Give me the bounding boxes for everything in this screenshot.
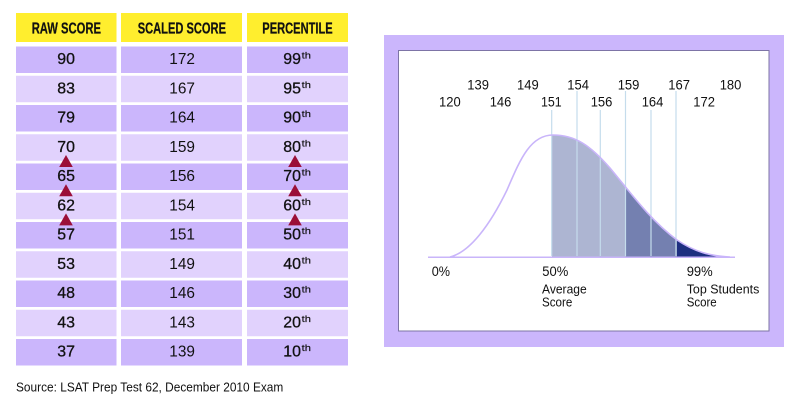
table header row: SCALED SCORE — [138, 20, 226, 37]
label: 50% average score: Score — [542, 296, 572, 310]
row 8 — [16, 251, 348, 278]
shaded bands — [552, 136, 716, 256]
row 8: 149 — [169, 256, 195, 273]
row 5: th — [302, 168, 311, 178]
row 9: 146 — [169, 285, 195, 302]
label: 50% average score: 50% — [542, 264, 568, 279]
scaled score labels: 167 — [668, 78, 690, 92]
row 7: 50 — [283, 226, 301, 244]
row 1: 99 — [283, 51, 301, 68]
row 6: th — [302, 197, 311, 207]
row 11 — [16, 339, 348, 366]
row 6 — [16, 193, 348, 219]
row 3: 79 — [57, 110, 75, 126]
row 4: 159 — [169, 139, 195, 156]
row 1: 90 — [57, 51, 75, 68]
scaled score labels — [439, 78, 741, 110]
row 9: 30 — [283, 285, 301, 302]
row 5 — [16, 164, 348, 190]
row 4 — [16, 134, 348, 161]
row 10: 20 — [283, 314, 301, 331]
table header row: PERCENTILE — [262, 20, 333, 37]
row 9: 48 — [57, 285, 75, 302]
row 3: 164 — [169, 110, 195, 126]
row 1: 172 — [169, 51, 195, 68]
scaled score labels: 139 — [467, 78, 489, 92]
row 8: th — [302, 255, 311, 265]
row 2: 167 — [169, 80, 195, 97]
row 3 — [16, 105, 348, 132]
row 4: th — [302, 138, 311, 148]
icons: percentile up arrows — [288, 155, 302, 225]
label: 0%: 0% — [432, 264, 450, 279]
row 1 — [16, 46, 348, 73]
row 6: 60 — [283, 197, 301, 214]
row 5: 70 — [283, 168, 301, 185]
label: 50% average score — [542, 264, 587, 310]
scaled score labels: 154 — [567, 78, 589, 92]
row 10: th — [302, 314, 311, 324]
row 11: 139 — [169, 344, 195, 360]
bell curve outline — [450, 135, 730, 257]
label: 99% top students score: 99% — [687, 264, 713, 279]
scaled score labels: 146 — [490, 95, 511, 110]
scaled score labels: 156 — [591, 95, 612, 110]
score table — [16, 13, 348, 366]
row 7: 151 — [169, 226, 195, 244]
row 2: 95 — [283, 80, 301, 97]
row 7: 57 — [57, 226, 75, 244]
row 9: th — [302, 284, 311, 294]
row 11: 37 — [57, 344, 75, 360]
scaled score labels: 172 — [693, 95, 715, 110]
row 3: th — [302, 109, 311, 119]
panel frame — [384, 35, 784, 347]
scaled score labels: 151 — [541, 95, 562, 110]
icons: raw score up arrows — [59, 155, 73, 225]
table header row: RAW SCORE — [32, 20, 101, 37]
row 9 — [16, 280, 348, 307]
panel: score distribution — [384, 35, 784, 347]
label: 99% top students score: Top Students — [687, 282, 759, 296]
label: 99% top students score — [687, 264, 759, 310]
table header row — [16, 13, 348, 42]
row 2: 83 — [57, 80, 75, 97]
row 2 — [16, 76, 348, 102]
row 6: 154 — [169, 197, 195, 214]
row 4: 80 — [283, 139, 301, 156]
row 10: 143 — [169, 314, 195, 331]
row 4: 70 — [57, 139, 75, 156]
scaled score labels: 164 — [642, 95, 664, 110]
row 11: 10 — [283, 344, 301, 360]
distribution curve chart — [428, 91, 737, 258]
row 3: 90 — [283, 110, 301, 126]
scaled score labels: 159 — [618, 78, 639, 92]
row 5: 156 — [169, 168, 195, 185]
row 8: 53 — [57, 256, 75, 273]
row 10 — [16, 310, 348, 336]
row 7 — [16, 222, 348, 248]
label: 50% average score: Average — [542, 282, 587, 296]
row 10: 43 — [57, 314, 75, 331]
score guide lines — [552, 91, 676, 256]
row 11: th — [302, 343, 311, 353]
scaled score labels: 149 — [517, 78, 539, 92]
baseline axis — [428, 256, 735, 258]
source note: Source: LSAT Prep Test 62, December 2010 Exam — [16, 380, 283, 394]
scaled score labels: 120 — [439, 95, 461, 110]
row 5: 65 — [57, 168, 75, 185]
row 8: 40 — [283, 256, 301, 273]
row 1: th — [302, 50, 311, 60]
row 6: 62 — [57, 197, 75, 214]
row 2: th — [302, 80, 311, 90]
scaled score labels: 180 — [720, 78, 741, 92]
row 7: th — [302, 226, 311, 236]
label: 99% top students score: Score — [687, 296, 717, 310]
